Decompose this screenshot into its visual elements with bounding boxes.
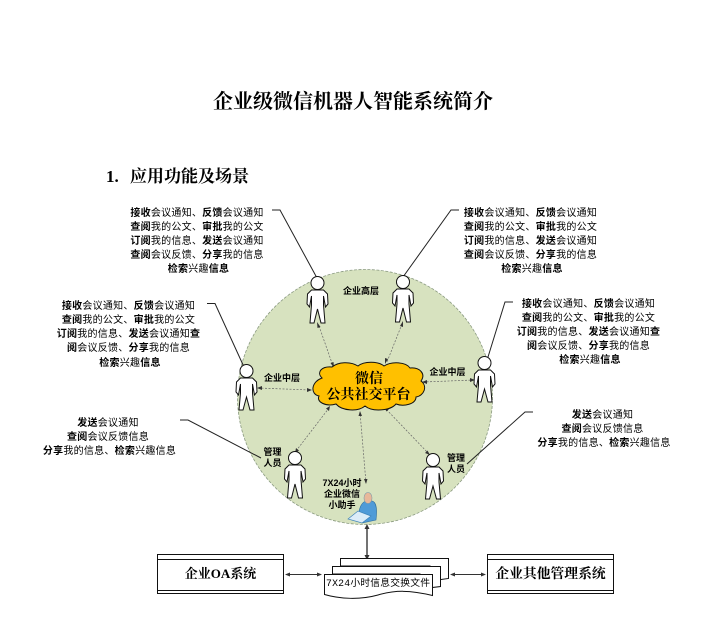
text block: middle left functions: 订阅我的信息、发送会议通知查: [57, 329, 200, 340]
text block: middle right functions: 检索兴趣信息: [559, 355, 621, 366]
section heading: 应用功能及场景: [130, 166, 250, 186]
text block: top right functions: 查阅会议反馈、分享我的信息: [464, 250, 597, 261]
label: 7x24 assistant: 小助手: [328, 499, 356, 510]
text block: top left functions: 查阅我的公文、审批我的公文: [130, 222, 264, 233]
person: staff left: [284, 452, 306, 498]
text block: lower left functions: 发送会议通知: [77, 418, 139, 429]
person: middle manager left: [236, 364, 257, 410]
cloud: WeChat public social platform: 公共社交平台: [326, 386, 411, 403]
box: enterprise OA system: 企业OA系统: [185, 566, 257, 581]
label: staff left: 人员: [263, 458, 282, 468]
text block: top right functions: 订阅我的信息、发送会议通知: [464, 236, 597, 247]
text block: middle right functions: 订阅我的信息、发送会议通知查: [517, 327, 660, 338]
text block: lower right functions: 分享我的信息、检索兴趣信息: [537, 438, 671, 449]
text block: middle left functions: 阅会议反馈、分享我的信息: [67, 343, 190, 354]
label: middle management left: 企业中层: [264, 372, 300, 383]
label: staff left: 管理: [263, 446, 282, 457]
text block: top left functions: 查阅会议反馈、分享我的信息: [130, 250, 264, 261]
section heading: 1.: [106, 167, 119, 186]
text block: middle right functions: 阅会议反馈、分享我的信息: [527, 341, 650, 352]
document stack: 7x24 information exchange file: [324, 558, 448, 598]
label: 7x24 assistant: 企业微信: [324, 488, 360, 499]
text block: lower right functions: 查阅会议反馈信息: [561, 424, 643, 435]
icon: assistant at laptop: [348, 492, 377, 523]
label: middle management right: 企业中层: [429, 366, 466, 377]
background circle: [238, 270, 492, 524]
person: staff right: [422, 454, 444, 499]
arrow: OA system to file: [285, 572, 322, 576]
arrow: assistant to file: [364, 524, 370, 560]
text block: top left functions: 检索兴趣信息: [168, 264, 229, 275]
text block: top right functions: 查阅我的公文、审批我的公文: [464, 222, 597, 233]
box: enterprise OA system: [158, 554, 284, 594]
box: other enterprise management systems: [488, 554, 614, 594]
text block: middle right functions: 接收会议通知、反馈会议通知: [522, 299, 655, 310]
cloud: WeChat public social platform: [313, 362, 425, 410]
text block: middle left functions: 接收会议通知、反馈会议通知: [62, 301, 195, 312]
title: 企业级微信机器人智能系统简介: [213, 90, 493, 113]
text block: top left functions: 订阅我的信息、发送会议通知: [130, 236, 264, 247]
text block: middle left functions: 检索兴趣信息: [99, 358, 161, 369]
label: staff right: 人员: [447, 464, 465, 474]
text block: top right functions: 接收会议通知、反馈会议通知: [464, 208, 597, 219]
text block: lower right functions: 发送会议通知: [572, 410, 633, 421]
text block: top left functions: 接收会议通知、反馈会议通知: [130, 208, 264, 219]
text block: top right functions: 检索兴趣信息: [501, 264, 563, 275]
label: 7x24 assistant: 7X24小时: [322, 477, 362, 488]
label: senior executives: 企业高层: [343, 285, 379, 296]
document stack: 7x24 information exchange file: 7X24小时信息交换文件: [326, 576, 430, 589]
text block: middle right functions: 查阅我的公文、审批我的公文: [522, 313, 655, 324]
arrow: file to other systems: [450, 572, 486, 576]
label: staff right: 管理: [447, 452, 465, 463]
box: other enterprise management systems: 企业其他管理系统: [495, 565, 607, 582]
arrowheads: [257, 321, 475, 484]
person: middle manager right: [474, 356, 495, 402]
leader lines: [180, 210, 533, 464]
person: executive left: [307, 276, 328, 323]
dashed arrows to cloud: [258, 324, 474, 483]
cloud: WeChat public social platform: 微信: [355, 370, 383, 387]
person: executive right: [392, 276, 414, 322]
text block: middle left functions: 查阅我的公文、审批我的公文: [62, 315, 195, 326]
text block: lower left functions: 分享我的信息、检索兴趣信息: [43, 446, 176, 457]
text block: lower left functions: 查阅会议反馈信息: [67, 432, 149, 443]
